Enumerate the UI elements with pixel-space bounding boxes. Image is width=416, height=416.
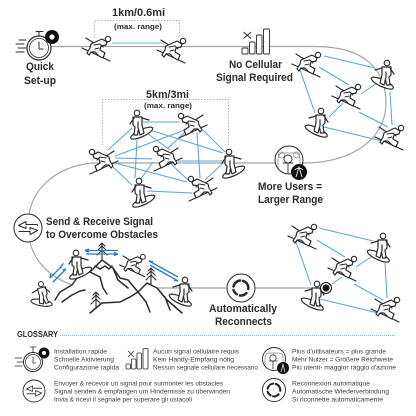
glossary text: quick set-up: Schnelle Aktivierung: [54, 356, 115, 364]
network: middle group: [89, 110, 246, 209]
heading: no cellular: No Cellular: [229, 59, 283, 71]
mountains: [55, 243, 182, 313]
route line: [28, 46, 386, 288]
glossary icon: reconnect: [262, 378, 286, 402]
glossary text: send and receive: Envoyer & recevoir un signal pour surmonter les obstacles: [54, 380, 223, 388]
icon: quick set-up stopwatch: [16, 30, 59, 60]
heading: send and receive: to Overcome Obstacles: [46, 229, 158, 241]
range sublabel 1km: (max. range): [114, 24, 162, 31]
heading: more users: More Users =: [258, 181, 322, 193]
glossary text: more users: Plus d'utilisateurs = plus grande: [292, 348, 387, 356]
glossary text: send and receive: Invia & ricevi il segnale per superare gli ostacoli: [54, 396, 192, 404]
range label 5km: 5km/3mi: [146, 89, 189, 101]
glossary text: no cellular: Kein Handy-Empfang nötig: [153, 356, 235, 364]
heading: automatically reconnects: Reconnects: [215, 316, 272, 328]
heading: quick set-up: Quick: [26, 61, 55, 73]
skier pair top: [82, 36, 186, 63]
heading: automatically reconnects: Automatically: [209, 303, 278, 315]
glossary text: quick set-up: Installation rapide: [54, 348, 108, 356]
network: right group: [292, 52, 404, 150]
glossary heading: GLOSSARY: [17, 330, 59, 339]
icon: send and receive: [14, 214, 42, 242]
mountain riders: [25, 250, 193, 313]
range sublabel 5km: (max. range): [144, 103, 192, 110]
icon: automatically reconnects: [227, 274, 255, 302]
icon: no cellular signal: [242, 29, 270, 54]
glossary text: send and receive: Signal senden & empfangen um Hindernisse zu überwinden: [54, 388, 231, 396]
glossary text: no cellular: Aucun signal cellulaire requis: [153, 348, 239, 356]
heading: no cellular: Signal Required: [216, 72, 293, 84]
heading: quick set-up: Set-up: [24, 75, 56, 87]
glossary icon: stopwatch: [15, 347, 50, 372]
glossary text: more users: Più utenti- maggior raggio d'azione: [292, 364, 397, 372]
heading: send and receive: Send & Receive Signal: [46, 216, 153, 228]
glossary text: reconnect: Automatische Wiederverbindung: [292, 388, 390, 396]
glossary icon: no cellular: [126, 348, 148, 369]
signal link 1km: [112, 42, 165, 44]
glossary text: no cellular: Nessun segnale cellulare necessario: [153, 364, 259, 372]
heading: more users: Larger Range: [258, 194, 323, 206]
range bracket 5km: [102, 100, 228, 145]
network: reconnect group: [288, 224, 400, 322]
glossary text: reconnect: Reconnexion automatique: [292, 380, 371, 388]
glossary text: reconnect: Si riconnette automaticamente: [292, 396, 384, 404]
range label 1km: 1km/0.6mi: [112, 7, 165, 19]
glossary icon: send and receive: [23, 380, 45, 402]
icon: more users: [275, 146, 307, 180]
glossary text: quick set-up: Configurazione rapida: [54, 364, 120, 372]
blue signal arrows: [50, 249, 178, 282]
glossary text: more users: Mehr Nutzer = Größere Reichweite: [292, 356, 394, 364]
glossary icon: more users: [262, 348, 289, 374]
range bracket 1km: [94, 20, 180, 38]
